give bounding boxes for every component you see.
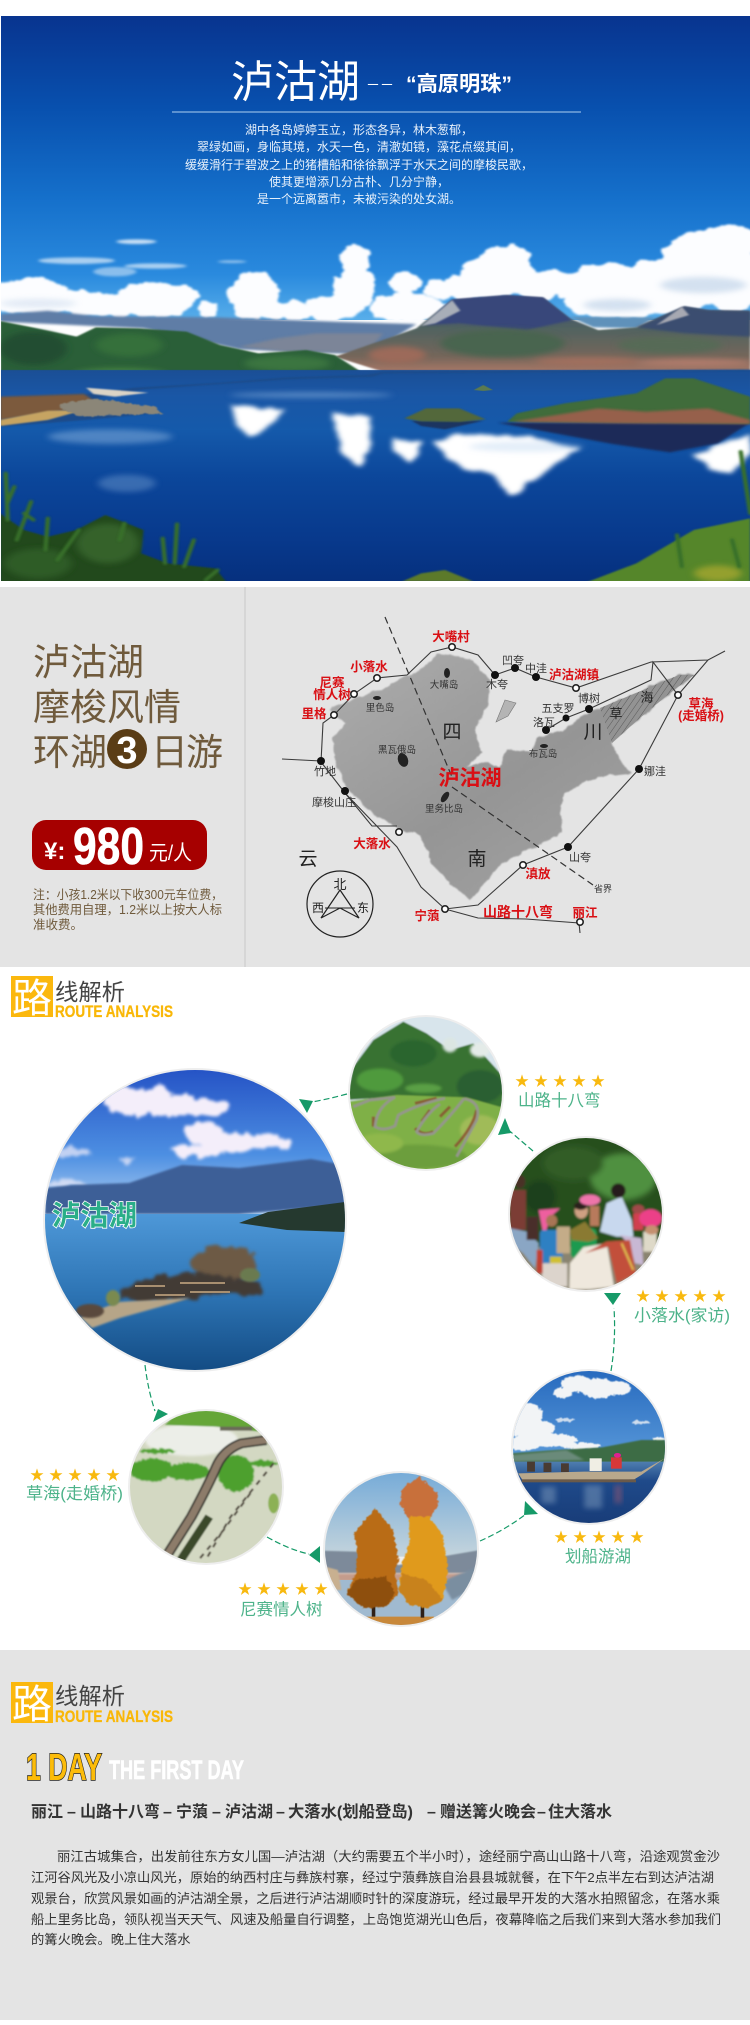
label: boating stars and name [554,1529,644,1566]
panel: route analysis circle diagram [11,976,730,1628]
map of Lugu Lake: 南 [467,848,487,870]
map of Lugu Lake: 大嘴岛 [430,679,458,691]
price badge [32,818,207,876]
label: lovers' tree stars and name: ★★★★★ [238,1581,328,1597]
section heading: route analysis: 线解析 [55,979,125,1005]
tour heading: 泸沽湖 [33,642,144,683]
map of Lugu Lake: 山夸 [569,850,591,864]
map of Lugu Lake: 木夸 [486,677,508,691]
map of Lugu Lake: 丽江 [572,906,598,920]
map of Lugu Lake: 草 [609,706,623,721]
map of Lugu Lake: 省界 [594,883,612,894]
day description text [31,1848,721,1947]
map of Lugu Lake: 里务比岛 [425,803,463,815]
map of Lugu Lake: 大嘴村 [432,629,470,644]
tour heading: 环湖 [33,732,107,773]
day route summary: 大落水(划船登岛) [288,1802,413,1821]
day route summary: – [276,1804,285,1821]
section heading: route analysis: 线解析 [55,1683,125,1709]
map of Lugu Lake: 情人树 [313,687,351,702]
day heading: THE FIRST DAY [109,1755,244,1785]
price note [33,887,223,932]
map of Lugu Lake: 摩梭山庄 [312,795,356,809]
label: Xiaoluoshui stars and name: 小落水(家访) [634,1306,730,1325]
map of Lugu Lake: 里色岛 [366,702,394,714]
day description text: 的篝火晚会。晚上住大落水 [31,1932,191,1947]
day route summary: – [67,1804,76,1821]
day route summary [31,1802,612,1821]
label: lovers' tree stars and name: 尼赛情人树 [240,1599,322,1619]
map of Lugu Lake [282,617,725,937]
map of Lugu Lake: 布瓦岛 [529,748,557,760]
map of Lugu Lake: 娜洼 [644,764,666,778]
price badge: 980 [73,818,144,876]
map of Lugu Lake: 大落水 [353,836,391,851]
map of Lugu Lake: 四 [442,722,462,743]
hero intro paragraph: 是一个远离嚣市，未被污染的处女湖。 [257,191,461,206]
day route summary: – [163,1804,172,1821]
day route summary: – [427,1804,436,1821]
map of Lugu Lake: 云 [298,849,318,870]
hero intro paragraph [185,122,533,206]
hero intro paragraph: 缓缓滑行于碧波之上的猪槽船和徐徐飘浮于水天之间的摩梭民歌， [185,157,533,172]
map of Lugu Lake: 山路十八弯 [483,904,553,920]
map of Lugu Lake: 宁蒗 [414,908,440,923]
day route summary: 住大落水 [548,1802,612,1821]
map of Lugu Lake: 中洼 [525,661,547,675]
label: lovers' tree stars and name [238,1581,328,1619]
section heading: route analysis: ROUTE ANALYSIS [55,1707,173,1726]
map of Lugu Lake: 泸沽湖 [438,767,502,790]
label: grass sea stars and name [26,1467,123,1503]
label: boating stars and name: 划船游湖 [565,1547,631,1566]
hero title: 泸沽湖 [231,58,360,107]
photo: Xiaoluoshui villagers [503,1133,667,1297]
panel: hero lake photograph with title [0,16,750,583]
photo: eighteen-bend mountain road [347,1013,507,1173]
icon: compass: 西 [312,901,324,915]
label: grass sea stars and name: 草海(走婚桥) [26,1484,123,1503]
map of Lugu Lake: 尼赛 [319,675,345,690]
price badge: ¥: [44,838,65,865]
tour heading: 游 [186,732,223,773]
icon: compass: 东 [357,901,369,915]
section heading: route analysis: ROUTE ANALYSIS [55,1002,173,1021]
photo: Lugu Lake main circle [40,1065,350,1374]
day description text: 江河谷风光及小凉山风光，原始的纳西村庄与彝族村寨，经过宁蒗彝族自治县县城就餐，在下午2点半左右到达泸沽湖 [31,1869,714,1885]
hero scene [0,16,750,583]
label: boating stars and name: ★★★★★ [554,1529,644,1545]
photo: Nisai lovers' tree [320,1470,481,1628]
tour heading: 日 [151,732,188,773]
price badge: 元/人 [149,842,192,865]
map of Lugu Lake: 泸沽湖镇 [549,667,599,682]
label: mountain road stars and name [515,1073,605,1110]
arrows between stops [145,1094,621,1563]
photo: Lugu Lake main circle: 泸沽湖 [52,1200,137,1231]
hero intro paragraph: 湖中各岛婷婷玉立，形态各异，林木葱郁， [245,122,473,137]
hero intro paragraph: 使其更增添几分古朴、几分宁静， [269,174,449,189]
panel: itinerary and map [0,587,750,967]
icon: compass: 北 [333,877,347,892]
day heading [26,1747,244,1789]
map of Lugu Lake: 竹地 [314,764,336,778]
day route summary: – [212,1804,221,1821]
day heading: 1 DAY [26,1747,102,1789]
map of Lugu Lake: (走婚桥) [678,708,724,723]
section heading: route analysis: 路 [12,977,52,1021]
hero title [231,58,512,107]
day route summary: 泸沽湖 [225,1802,273,1821]
map of Lugu Lake: 洛瓦 [533,715,555,729]
day route summary: 山路十八弯 [80,1802,160,1821]
day route summary: 赠送篝火晚会 [440,1802,536,1821]
map of Lugu Lake: 草海 [688,696,714,711]
map of Lugu Lake: 滇放 [525,866,551,881]
price note: 注：小孩1.2米以下收300元车位费， [33,887,223,902]
map of Lugu Lake: 博树 [578,691,600,705]
map of Lugu Lake: 黑瓦俄岛 [378,744,416,756]
photo: boating on the lake [504,1367,670,1525]
hero title: “高原明珠” [406,72,512,96]
map of Lugu Lake: 里格 [301,706,327,721]
icon: compass [307,871,373,937]
day description text: 船上里务比岛，领队视当天天气、风速及船量自行调整，上岛饱览湖光山色后，夜幕降临之后我们来到大落水参加我们 [31,1911,721,1927]
map of Lugu Lake: 五支罗 [542,702,574,715]
day description text: 观景台，欣赏风景如画的泸沽湖全景，之后进行泸沽湖顺时针的深度游玩，经过最早开发的大落水拍照留念，在落水乘 [31,1890,720,1906]
day route summary: 宁蒗 [176,1802,208,1821]
label: mountain road stars and name: 山路十八弯 [518,1091,600,1110]
section heading: route analysis [11,976,173,1021]
label: mountain road stars and name: ★★★★★ [515,1073,605,1089]
map of Lugu Lake: 小落水 [350,659,388,674]
tour heading: 3 [116,730,138,772]
label: Xiaoluoshui stars and name: ★★★★★ [636,1288,726,1304]
label: Xiaoluoshui stars and name [634,1288,730,1325]
day description text: 丽江古城集合，出发前往东方女儿国—泸沽湖（大约需要五个半小时），途经丽宁高山山路十八弯，沿途观赏金沙 [57,1848,720,1864]
section heading: route analysis: 路 [12,1683,52,1727]
price note: 准收费。 [33,918,83,932]
hero intro paragraph: 翠绿如画，身临其境，水天一色，清澈如镜，藻花点缀其间， [197,139,521,154]
map of Lugu Lake: 川 [583,722,603,743]
hero title: -- [366,76,394,91]
panel: day one itinerary [0,1650,750,2020]
section heading: route analysis [11,1682,173,1727]
map of Lugu Lake: 凹夸 [502,653,524,667]
photo: grass sea walking bridge [127,1407,288,1567]
map of Lugu Lake: 海 [640,690,654,705]
day route summary: – [537,1804,546,1821]
tour heading [33,642,223,773]
day route summary: 丽江 [31,1803,63,1821]
label: grass sea stars and name: ★★★★★ [30,1467,120,1483]
tour heading: 摩梭风情 [33,687,181,728]
price note: 其他费用自理，1.2米以上按大人标 [33,903,222,917]
